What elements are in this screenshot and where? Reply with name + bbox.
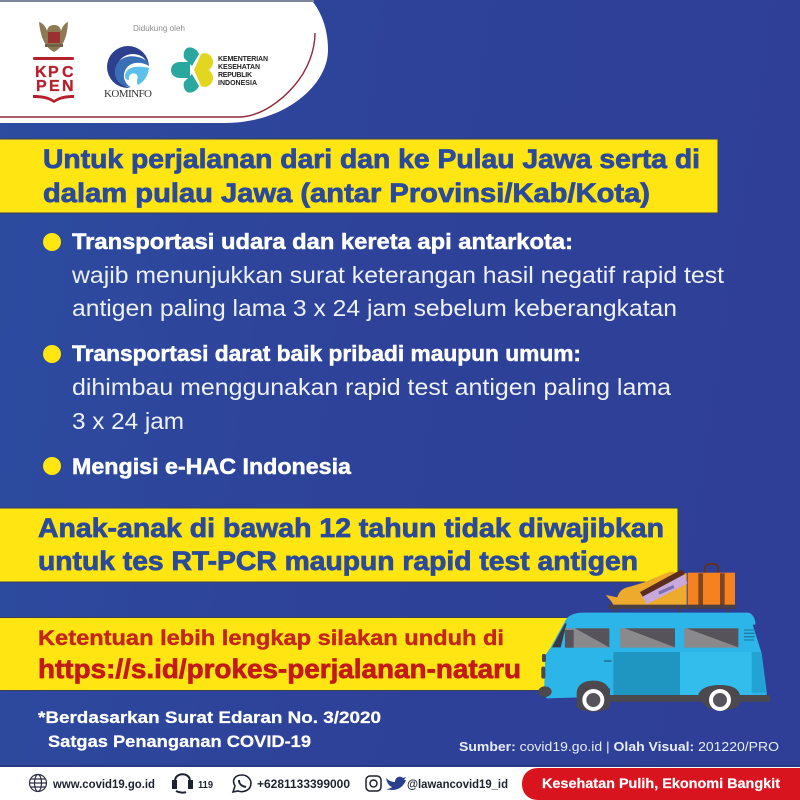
panel: logo header	[0, 0, 328, 123]
panel: children notice banner	[0, 508, 678, 582]
icon: whatsapp	[233, 775, 251, 792]
rule 1 title: Transportasi udara dan kereta api antarkota:	[72, 229, 573, 254]
van body	[544, 613, 767, 698]
hotline: 119	[198, 779, 213, 791]
icon: headset	[173, 774, 192, 793]
icon: globe	[30, 774, 46, 792]
Kominfo wordmark: KOMINFO	[104, 88, 152, 100]
bullet	[43, 233, 61, 251]
rule 2 text line 2: 3 x 24 jam	[72, 408, 184, 434]
front wheel	[582, 689, 604, 711]
icon: instagram	[366, 776, 381, 791]
bullet	[43, 345, 61, 363]
notice line 1: Anak-anak di bawah 12 tahun tidak diwajibkan	[38, 513, 664, 543]
footnote: legal basis	[38, 708, 381, 751]
supported-by caption: Didukung oleh	[133, 24, 185, 33]
van windows	[552, 623, 738, 648]
KPC label: KPC	[35, 64, 74, 81]
icon: twitter	[386, 777, 406, 790]
bullet	[43, 457, 61, 475]
icon: yellow bag	[606, 572, 687, 605]
source credit: Sumber: covid19.go.id | Olah Visual: 201220/PRO	[459, 739, 779, 754]
rule 1 text line 2: antigen paling lama 3 x 24 jam sebelum keberangkatan	[72, 295, 677, 321]
phone number: +6281133399000	[257, 779, 350, 791]
ministry name: REPUBLIK	[218, 72, 252, 79]
heading line 2: dalam pulau Jawa (antar Provinsi/Kab/Kota)	[43, 178, 650, 208]
ministry name: INDONESIA	[218, 80, 257, 87]
notice line 2: untuk tes RT-PCR maupun rapid test antigen	[38, 546, 638, 576]
rule 3 title: Mengisi e-HAC Indonesia	[72, 454, 352, 479]
icon: purple suitcase	[640, 569, 687, 604]
footnote: legal basis: *Berdasarkan Surat Edaran No. 3/2020	[38, 708, 381, 727]
heading line 1: Untuk perjalanan dari dan ke Pulau Jawa serta di	[43, 144, 700, 174]
logo: KPC PEN	[33, 22, 74, 103]
slogan pill: Kesehatan Pulih, Ekonomi Bangkit	[542, 776, 781, 791]
ministry name: KEMENTERIAN	[218, 56, 268, 63]
van door handle	[604, 660, 611, 662]
social handle: @lawancovid19_id	[407, 779, 508, 791]
download link: https://s.id/prokes-perjalanan-nataru	[38, 654, 521, 684]
panel: heading banner	[0, 138, 718, 214]
slogan pill	[522, 768, 800, 800]
icon: orange suitcase	[688, 564, 735, 605]
rule 2 text line 1: dihimbau menggunakan rapid test antigen paling lama	[72, 374, 671, 400]
ministry name	[218, 56, 268, 87]
PEN label: PEN	[36, 78, 74, 95]
van side panel	[613, 652, 680, 695]
roof rack	[608, 605, 736, 626]
panel: rule 3 e-HAC	[43, 454, 352, 479]
panel: download banner	[0, 617, 570, 691]
ministry name: KESEHATAN	[218, 64, 260, 71]
logo: Kementerian Kesehatan	[171, 47, 268, 93]
panel: rule 2 land transport	[43, 341, 671, 434]
panel: rule 1 air and rail	[43, 229, 725, 321]
rule 2 title: Transportasi darat baik pribadi maupun umum:	[72, 341, 581, 366]
rule 1 text line 1: wajib menunjukkan surat keterangan hasil negatif rapid test	[71, 262, 725, 288]
footer bar	[0, 765, 800, 800]
van chassis	[538, 654, 770, 712]
website: www.covid19.go.id	[52, 779, 155, 791]
rear wheel	[709, 689, 731, 711]
download line 1: Ketentuan lebih lengkap silakan unduh di	[38, 627, 504, 650]
illustration: van with luggage	[538, 564, 770, 712]
footnote: legal basis: Satgas Penanganan COVID-19	[48, 732, 311, 751]
icon: garuda emblem	[39, 22, 68, 52]
van vent	[744, 630, 755, 640]
logo: Kominfo	[104, 46, 152, 100]
